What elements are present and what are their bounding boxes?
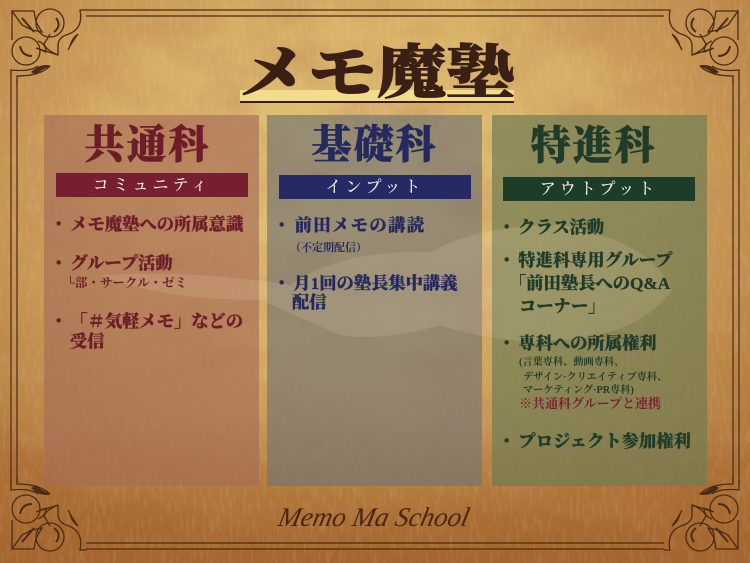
list: 共通科 items: メモ魔塾への所属意識 — [70, 215, 243, 234]
title underline — [240, 90, 514, 103]
list: 特進科 items: ※共通科グループと連携 — [519, 396, 661, 411]
list: 特進科 items: コーナー」 — [519, 297, 605, 316]
list: 特進科 items: ・ — [498, 432, 515, 451]
list: 特進科 items: 「前田塾長へのQ&A — [509, 274, 670, 293]
label band: コミュニティ — [56, 173, 248, 197]
list: 基礎科 items: （不定期配信） — [290, 242, 367, 254]
title: メモ魔塾 — [239, 41, 515, 105]
list: 共通科 items: 「＃気軽メモ」などの — [70, 312, 243, 331]
label band: アウトプット: アウトプット — [540, 181, 658, 198]
heading: 基礎科: 基礎科 — [312, 122, 438, 167]
list: 基礎科 items: 配信 — [292, 293, 327, 312]
list: 特進科 items: プロジェクト参加権利 — [518, 432, 691, 451]
list: 基礎科 items: ・ — [273, 274, 290, 293]
title text: メモ魔塾 — [239, 41, 515, 105]
list: 基礎科 items — [273, 216, 458, 312]
list: 共通科 items: └部・サークル・ゼミ — [66, 276, 187, 290]
list: 特進科 items: マーケティング·PR専科) — [523, 385, 634, 396]
label band: コミュニティ: コミュニティ — [93, 177, 211, 194]
list: 特進科 items: ・ — [498, 251, 515, 270]
heading: 特進科: 特進科 — [530, 123, 656, 168]
list: 特進科 items: ・ — [498, 218, 515, 237]
panel: 共通科 — [44, 115, 259, 486]
list: 特進科 items: ・ — [498, 334, 515, 353]
list: 特進科 items: (言葉専科、動画専科、 — [519, 357, 624, 368]
panel: 基礎科 — [267, 115, 482, 486]
label band: インプット — [279, 175, 471, 199]
list: 特進科 items: クラス活動 — [518, 218, 604, 237]
list: 共通科 items — [50, 215, 244, 351]
list: 基礎科 items: 月1回の塾長集中講義 — [293, 274, 457, 293]
list: 特進科 items: 専科への所属権利 — [518, 334, 657, 353]
list: 特進科 items: デザイン·クリエイティブ専科、 — [523, 372, 667, 383]
label band: インプット: インプット — [326, 179, 424, 196]
list: 共通科 items: グループ活動 — [70, 254, 173, 273]
list: 共通科 items: ・ — [50, 215, 67, 234]
list: 共通科 items: ・ — [50, 312, 67, 331]
footer script: Memo Ma School: Memo Ma School — [276, 502, 472, 532]
label band: アウトプット — [503, 177, 695, 201]
list: 特進科 items: 特進科専用グループ — [518, 251, 672, 270]
heading: 共通科: 共通科 — [84, 122, 210, 167]
list: 共通科 items: 受信 — [70, 332, 105, 351]
list: 基礎科 items: ・ — [273, 216, 292, 235]
panel: 特進科 — [492, 115, 707, 486]
list: 基礎科 items: 前田メモの講読 — [295, 216, 425, 235]
list: 共通科 items: ・ — [50, 254, 67, 273]
list: 特進科 items — [498, 218, 691, 451]
